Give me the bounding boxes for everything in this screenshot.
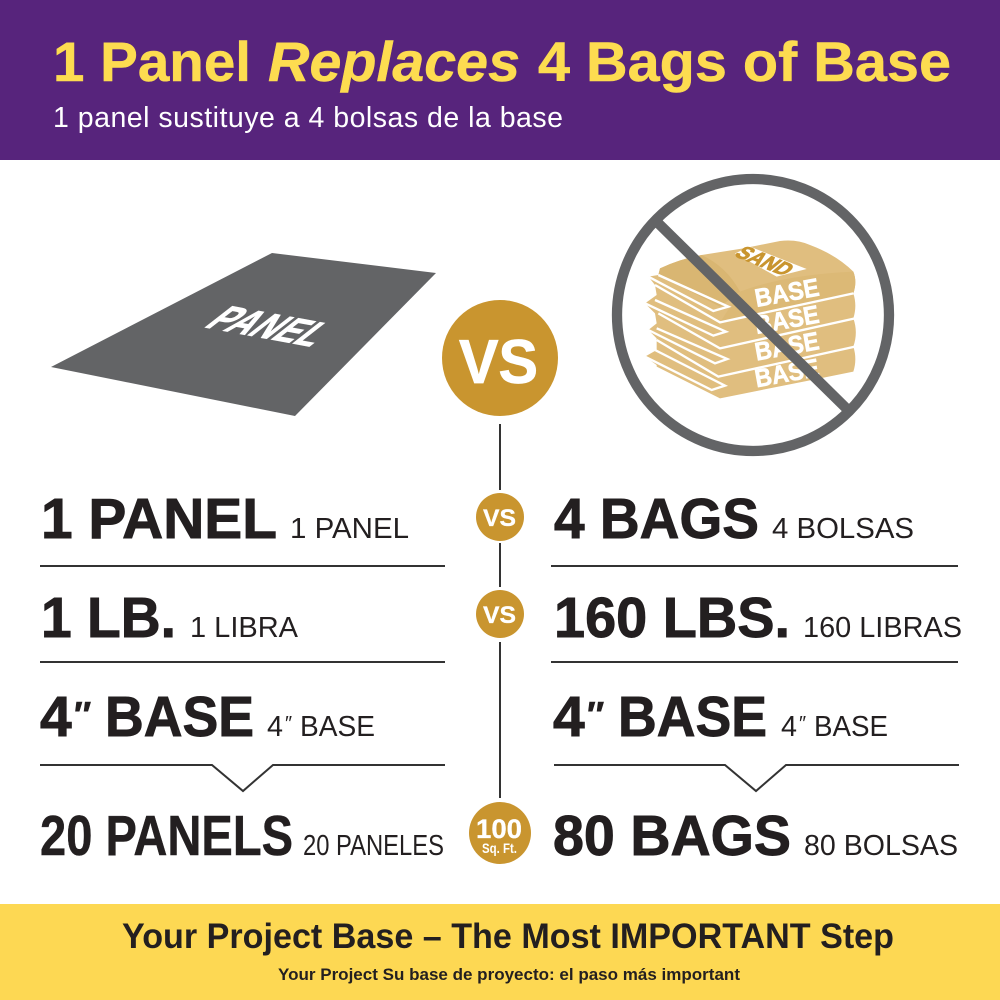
large VS badge: VS	[459, 328, 538, 397]
icon: panel sheet: PANEL	[195, 299, 346, 353]
icon: prohibition sign	[617, 179, 889, 451]
row 3 right: 4 inch base: BASE	[814, 711, 888, 743]
row 3 left: 4 inch base: BASE	[105, 685, 254, 749]
row 3 right: 4 inch base	[553, 685, 888, 749]
row 3 left: 4 inch base: 4	[267, 711, 283, 743]
title: Replaces	[268, 30, 520, 93]
row 3 right: 4 inch base: BASE	[618, 685, 767, 749]
row dividers	[40, 566, 958, 662]
right chevron divider	[554, 765, 959, 791]
row 2 left: 1 lb	[41, 586, 299, 650]
row 1 right: 4 bags	[554, 487, 914, 551]
100 sq ft badge	[469, 802, 531, 864]
subtitle: 1 panel sustituye a 4 bolsas de la base	[53, 102, 563, 134]
row 1 VS badge	[476, 493, 524, 541]
footer subheading: Your Project Su base de proyecto: el paso más important	[278, 965, 740, 984]
row 3 right: 4 inch base: 4	[553, 685, 585, 749]
row 1 right: 4 bags: 4 BAGS	[554, 487, 759, 551]
row 1 left: 1 panel: 1 PANEL	[41, 487, 277, 551]
center vertical connector	[499, 424, 501, 798]
title	[53, 30, 951, 93]
row 3 right: 4 inch base: 4	[781, 711, 797, 743]
row 2 right: 160 lbs	[554, 586, 962, 650]
row 3 right: 4 inch base: ″	[799, 713, 806, 735]
large VS badge	[442, 300, 558, 416]
icon: base bags: SAND	[729, 243, 800, 280]
row 2 VS badge: VS	[483, 602, 516, 629]
icon: base bags	[645, 240, 856, 398]
row 1 VS badge: VS	[483, 505, 516, 532]
row 3 left: 4 inch base: ″	[285, 713, 292, 735]
header banner	[0, 0, 1000, 160]
row 3 right: 4 inch base: ″	[587, 694, 604, 735]
title: 1 Panel	[53, 30, 251, 93]
icon: panel sheet	[51, 253, 436, 416]
icon: base bags: BASE	[753, 354, 821, 393]
left chevron divider	[40, 765, 445, 791]
row 4 right: 80 bags: 80 BAGS	[553, 804, 791, 868]
icon: base bags: BASE	[753, 274, 821, 313]
title: 4 Bags of Base	[538, 30, 951, 93]
row 4 left: 20 panels: 20 PANELES	[303, 830, 444, 862]
100 sq ft badge: 100	[476, 814, 522, 844]
row 2 left: 1 lb: 1 LIBRA	[190, 612, 299, 644]
row 3 left: 4 inch base: 4	[40, 685, 72, 749]
row 2 right: 160 lbs: 160 LBS.	[554, 586, 790, 650]
icon: base bags: BASE	[753, 301, 821, 340]
row 3 left: 4 inch base: ″	[74, 694, 91, 735]
footer heading: Your Project Base – The Most IMPORTANT Step	[122, 917, 894, 956]
row 1 left: 1 panel: 1 PANEL	[290, 513, 409, 545]
row 2 VS badge	[476, 590, 524, 638]
row 4 right: 80 bags	[553, 804, 958, 868]
icon: base bags: BASE	[753, 327, 821, 367]
row 2 right: 160 lbs: 160 LIBRAS	[803, 612, 962, 644]
row 3 left: 4 inch base: BASE	[300, 711, 375, 743]
row 4 left: 20 panels: 20 PANELS	[40, 804, 293, 868]
row 1 left: 1 panel	[41, 487, 409, 551]
100 sq ft badge: Sq. Ft.	[482, 840, 517, 856]
footer banner	[0, 904, 1000, 1000]
row 3 left: 4 inch base	[40, 685, 375, 749]
row 1 right: 4 bags: 4 BOLSAS	[772, 513, 914, 545]
row 2 left: 1 lb: 1 LB.	[41, 586, 176, 650]
row 4 right: 80 bags: 80 BOLSAS	[804, 830, 958, 862]
